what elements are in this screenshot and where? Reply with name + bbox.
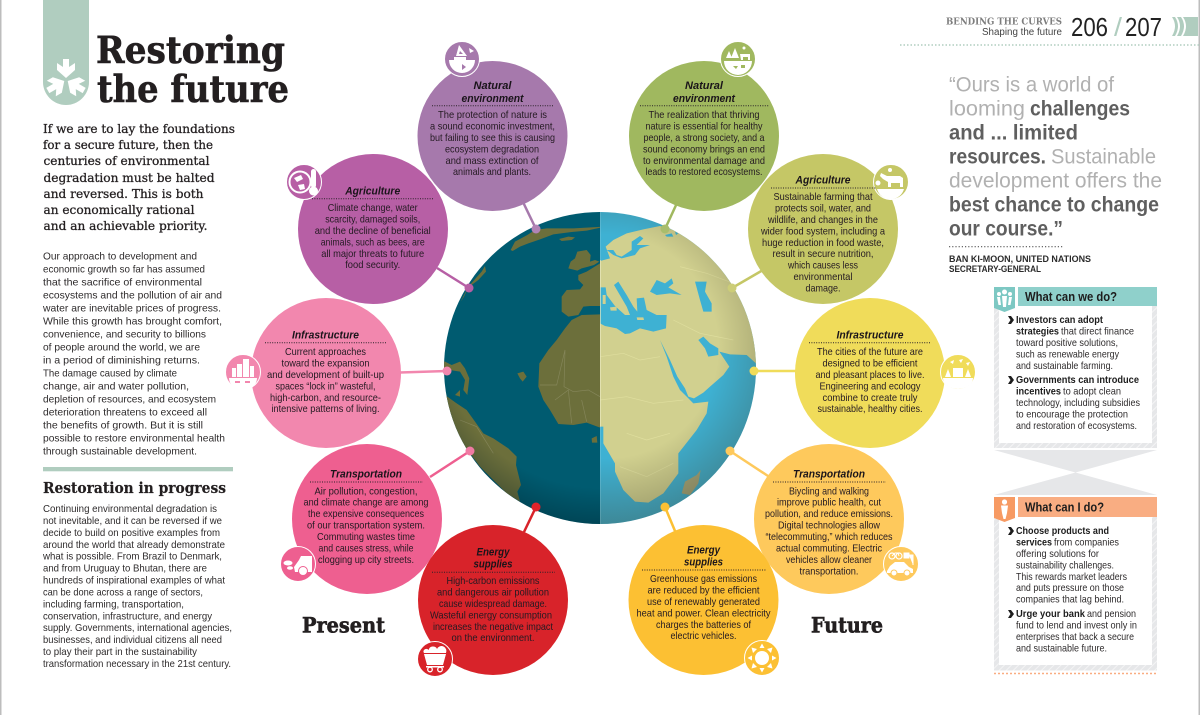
list: and restoration of ecosystems. (1016, 421, 1137, 432)
text: a sound economic investment, (430, 122, 555, 132)
icon: three arrows (43, 59, 89, 98)
text (765, 486, 893, 577)
text: which causes less (787, 261, 858, 272)
intro text: If we are to lay the foundations (43, 121, 235, 136)
text: leads to restored ecosystems. (646, 167, 762, 178)
quote: our course.” (949, 217, 1063, 241)
text: sound economy brings an end (643, 144, 765, 155)
list (1008, 315, 1140, 432)
quote: and ... limited (949, 121, 1078, 145)
body paragraph: Our approach to development and (43, 252, 197, 262)
text: huge reduction in food waste, (762, 238, 884, 249)
text: the expensive consequences (308, 509, 424, 520)
text: toward the expansion (282, 358, 370, 369)
quote: “Ours is a world of (949, 73, 1114, 97)
quote attribution (949, 254, 1091, 274)
body paragraph: While this growth has brought comfort, (43, 316, 222, 328)
icon: bicycle and electric car (884, 546, 918, 582)
text: clogging up city streets. (318, 555, 414, 566)
quote attribution: BAN KI-MOON, UNITED NATIONS (949, 254, 1091, 264)
intro text: for a secure future, then the (43, 137, 213, 152)
body paragraph: change, air and water pollution, (43, 382, 189, 392)
body paragraph (42, 252, 225, 458)
quote (949, 73, 1162, 241)
list: that direct finance (1061, 326, 1134, 338)
text: The cities of the future are (817, 347, 923, 358)
text (304, 486, 429, 566)
text: heat and power. Clean electricity (636, 608, 771, 619)
text: use of renewably generated (647, 597, 760, 608)
list: sustainability challenges. (1016, 560, 1114, 571)
heading: Energy (687, 545, 721, 557)
text: environmental (794, 272, 852, 283)
text: cause widespread damage. (439, 599, 547, 610)
intro text: centuries of environmental (44, 153, 210, 168)
text: vehicles allow cleaner (786, 555, 872, 566)
text: food security. (345, 260, 400, 271)
restoration paragraph: supply. Governments, international agencies, (43, 623, 232, 634)
quote: challenges (1030, 97, 1130, 121)
icon: trees and animal (720, 42, 756, 76)
text: animals and plants. (453, 167, 531, 178)
list: technology, including subsidies (1016, 398, 1140, 409)
text: ecosystem degradation (445, 144, 539, 155)
list: toward positive solutions, (1016, 338, 1118, 349)
body paragraph: The damage caused by climate (43, 368, 177, 380)
restoration paragraph: Continuing environmental degradation is (43, 504, 217, 515)
text: scarcity, damaged soils, (325, 214, 420, 225)
text: of our transportation system. (307, 521, 425, 532)
restoration paragraph: transformation necessary in the 21st century. (43, 659, 231, 670)
restoration paragraph (42, 504, 232, 670)
restoration paragraph: around the world that already demonstrate (43, 540, 225, 551)
future half of globe (600, 212, 756, 524)
text (430, 576, 553, 644)
icon: sail and ground (444, 42, 480, 76)
text: wider food system, including a (760, 226, 885, 237)
text: result in secure nutrition, (772, 249, 874, 260)
panel: natural environment present (418, 42, 568, 234)
list: fund to lend and invest only in (1016, 620, 1137, 631)
text: and mass extinction of (446, 156, 539, 167)
panel: energy supplies present (418, 502, 568, 676)
quote: looming (949, 97, 1025, 121)
panel: transportation future (726, 444, 918, 594)
body paragraph: deterioration threatens to exceed all (43, 408, 207, 418)
panel: what can we do (994, 287, 1157, 448)
icon: green city (940, 354, 976, 390)
text: The realization that thriving (648, 110, 760, 121)
circle (754, 444, 904, 594)
title: the future (97, 67, 289, 111)
text: high-carbon, and resource- (270, 393, 381, 404)
label: present: Present (302, 613, 385, 638)
restoration paragraph: not inevitable, and it can be reversed if we (43, 516, 222, 527)
restoration paragraph: what is possible. From Brazil to Denmark, (42, 552, 222, 563)
icon: globe and thermometer (286, 164, 322, 200)
text: Wasteful energy consumption (430, 610, 552, 621)
circle (418, 525, 568, 675)
list: offering solutions for (1016, 549, 1100, 560)
text: Current approaches (285, 347, 366, 358)
circle (795, 298, 945, 448)
heading: What can we do? (1025, 289, 1117, 304)
list: enterprises that back a secure (1016, 632, 1134, 643)
list: services (1016, 537, 1052, 548)
restoration paragraph: including farming, transportation, (43, 599, 184, 610)
header bar (1018, 497, 1157, 517)
text: The protection of nature is (438, 110, 547, 121)
body paragraph: through sustainable development. (43, 446, 197, 458)
text: charges the batteries of (656, 620, 751, 631)
quote: development offers the (949, 169, 1162, 193)
heading: What can I do? (1025, 500, 1104, 515)
text (430, 110, 555, 178)
heading (474, 547, 512, 571)
heading: environment (462, 93, 525, 105)
icon: cow (874, 164, 908, 200)
text: spaces “lock in” wasteful, (276, 381, 376, 392)
list: strategies (1016, 326, 1059, 338)
body paragraph: ecosystems and the pollution of air and (43, 290, 222, 302)
label: future: Future (811, 613, 883, 638)
title tab with icon (43, 0, 89, 105)
text: transportation. (800, 566, 858, 577)
restoration paragraph: conservation, infrastructure, and energy (43, 611, 213, 622)
panel: infrastructure present (226, 298, 452, 448)
text: Climate change, water (328, 203, 418, 214)
body paragraph: the benefits of growth. But it is still (43, 420, 203, 432)
intro text: degradation must be halted (44, 170, 214, 185)
page header (946, 12, 1198, 42)
text: and development of built-up (267, 370, 384, 381)
panel: agriculture future (728, 154, 908, 304)
text: combine to create truly (822, 393, 918, 404)
text: and climate change are among (304, 498, 429, 509)
intro text: an economically rational (44, 202, 194, 217)
quote: Sustainable (1051, 145, 1156, 169)
text: Engineering and ecology (820, 381, 921, 392)
list: to adopt clean (1063, 386, 1121, 398)
restoration paragraph: businesses, and individual citizens all need (43, 635, 222, 646)
body paragraph: water are inevitable prices of progress. (42, 304, 221, 314)
list: and sustainable future. (1016, 643, 1107, 654)
circle (292, 444, 442, 594)
list: and puts pressure on those (1016, 583, 1124, 594)
present half of globe (440, 210, 605, 527)
text: High-carbon emissions (446, 576, 540, 587)
text: animals, such as bees, are (321, 237, 425, 248)
list: such as renewable energy (1016, 349, 1120, 360)
icon: person (994, 497, 1015, 522)
circle (418, 61, 568, 211)
arrow: hourglass connector (994, 450, 1157, 495)
page header: / (1114, 12, 1123, 42)
page header: 206 (1071, 12, 1108, 42)
list: and pension (1087, 609, 1136, 620)
icon: chevrons (1172, 17, 1198, 36)
heading: Infrastructure (292, 329, 359, 341)
text: sustainable, healthy cities. (818, 404, 922, 415)
list: companies that lag behind. (1016, 595, 1124, 606)
text: electric vehicles. (670, 631, 736, 642)
heading (684, 545, 723, 568)
intro text (43, 121, 235, 233)
list (1008, 526, 1137, 654)
heading (673, 80, 736, 105)
intro text: and an achievable priority. (44, 218, 208, 233)
body paragraph: depletion of resources, and ecosystem (43, 394, 216, 406)
list: Governments can introduce (1016, 375, 1139, 386)
page header: 207 (1125, 12, 1162, 42)
heading: Natural (474, 80, 512, 92)
text: and the decline of beneficial (315, 226, 431, 237)
heading: Agriculture (795, 175, 850, 187)
panel: natural environment future (629, 42, 779, 234)
quote: resources. (949, 145, 1046, 169)
text (636, 574, 771, 642)
restoration paragraph: can be done across a range of sectors, (43, 588, 203, 598)
list: incentives (1016, 386, 1061, 398)
restoration paragraph: hundreds of inspirational examples of what (43, 576, 225, 586)
list: Choose products and (1016, 526, 1109, 537)
heading: Agriculture (344, 186, 400, 198)
icon: people (994, 287, 1015, 312)
heading: Natural (685, 80, 724, 92)
heading: supplies (684, 556, 723, 568)
text: Commuting wastes time (317, 532, 415, 543)
text: and pleasant places to live. (816, 370, 924, 381)
heading: Energy (476, 547, 510, 559)
panel: infrastructure future (750, 298, 976, 448)
panel: energy supplies future (628, 502, 780, 676)
text: “telecommuting,” which reduces (766, 532, 892, 543)
text: Greenhouse gas emissions (650, 574, 757, 585)
icon: coal cart (418, 642, 452, 676)
circle (629, 61, 779, 211)
text: protects soil, water, and (775, 203, 871, 214)
text: actual commuting. Electric (776, 544, 882, 554)
text: Biycling and walking (789, 486, 869, 497)
text: nature is essential for healthy (646, 122, 763, 132)
text: wildlife, and changes in the (767, 215, 878, 226)
text: but failing to see this is causing (430, 133, 555, 144)
text (267, 347, 384, 415)
circle (251, 298, 401, 448)
body paragraph: in a period of diminishing returns. (43, 356, 200, 366)
body paragraph: economic growth so far has assumed (43, 264, 205, 276)
list: Investors can adopt (1016, 315, 1104, 326)
heading (462, 80, 525, 105)
restoration paragraph: to play their part in the sustainability (43, 647, 198, 658)
text: increases the negative impact (433, 622, 553, 633)
text (643, 110, 765, 178)
text: improve public health, cut (777, 498, 881, 509)
globe (440, 210, 773, 527)
restoration paragraph: and from Uruguay to Bhutan, there are (43, 564, 207, 575)
icon: sun (744, 640, 780, 676)
heading: Infrastructure (836, 329, 904, 341)
heading: restoration in progress: Restoration in progress (43, 479, 226, 497)
list: to encourage the protection (1016, 409, 1128, 420)
text: all major threats to future (321, 249, 424, 260)
page header: BENDING THE CURVES (946, 18, 1062, 28)
heading: supplies (474, 559, 512, 571)
text: designed to be efficient (822, 358, 918, 369)
list: Urge your bank (1016, 609, 1085, 620)
text (315, 203, 431, 271)
circle (298, 154, 448, 304)
heading: Transportation (330, 468, 402, 480)
intro text: and reversed. This is both (44, 186, 204, 201)
text: people, a strong society, and a (644, 133, 765, 144)
body paragraph: of people around the world, we are (43, 342, 200, 354)
heading: Transportation (793, 468, 865, 480)
text: are reduced by the efficient (648, 585, 760, 596)
text: damage. (806, 284, 840, 295)
text: and dangerous air pollution (437, 587, 549, 598)
quote: best chance to change (949, 193, 1159, 217)
text: Air pollution, congestion, (314, 486, 418, 497)
list: This rewards market leaders (1016, 572, 1127, 583)
text: Sustainable farming that (774, 192, 873, 203)
panel: transportation present (280, 444, 474, 594)
circle (628, 525, 778, 675)
icon: city (226, 354, 260, 390)
text (760, 192, 885, 295)
body paragraph: convenience, and security to billions (43, 330, 206, 340)
circle (748, 154, 898, 304)
text: intensive patterns of living. (272, 404, 380, 415)
list: from companies (1054, 537, 1119, 548)
quote attribution: SECRETARY-GENERAL (949, 264, 1041, 274)
restoration paragraph: decide to build on positive examples from (43, 528, 220, 539)
text (816, 347, 924, 415)
list: and sustainable farming. (1016, 361, 1113, 372)
header bar (1018, 287, 1157, 306)
body paragraph: that the sacrifice of environmental (43, 278, 202, 288)
panel: what can i do (994, 497, 1157, 670)
text: to environmental damage and (643, 156, 765, 167)
title: Restoring (96, 28, 285, 72)
page header: Shaping the future (982, 27, 1062, 38)
text: on the environment. (452, 633, 534, 644)
text: and causes stress, while (318, 544, 414, 554)
title (96, 28, 289, 111)
icon: car and smoke (280, 546, 316, 582)
body paragraph: possible to restore environmental health (43, 434, 225, 444)
text: Digital technologies allow (778, 521, 880, 532)
panel: agriculture present (286, 154, 474, 304)
heading: environment (673, 93, 736, 105)
text: pollution, and reduce emissions. (765, 509, 893, 520)
